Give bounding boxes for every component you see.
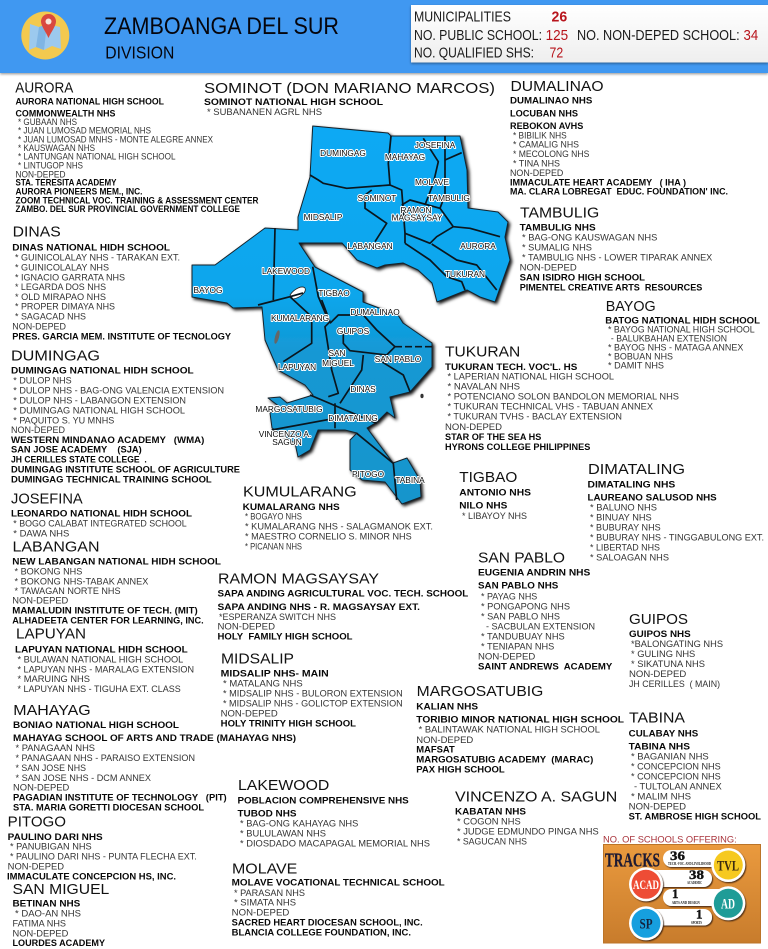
panel: Mahayag: NON-DEPED	[13, 783, 70, 793]
panel: Molave: MOLAVE	[232, 860, 297, 877]
panel: Dumalinao: DUMALINAO	[510, 78, 604, 95]
panel: Dumalinao: DUMALINAO NHS	[510, 96, 592, 106]
panel: Dumingag: DUMINGAG NATIONAL HIDH SCHOOL	[11, 366, 194, 376]
panel: Margosatubig: MARGOSATUBIG ACADEMY (MARAC)	[416, 755, 593, 765]
panel: Ramon Magsaysay: SAPA ANDING NHS - R. MAGSAYSAY EXT.	[218, 602, 420, 612]
panel: Bayog: BATOG NATIONAL HIDH SCHOOL	[605, 316, 760, 326]
panel: Dumingag: DUMINGAG TECHNICAL TRAINING SCHOOL	[11, 474, 212, 484]
panel: Tabina	[629, 710, 761, 822]
panel: Midsalip: MIDSALIP NHS- MAIN	[221, 669, 329, 679]
panel: Dimataling: * SALOAGAN NHS	[590, 553, 669, 563]
panel: San Miguel: NON-DEPED	[12, 928, 69, 938]
panel: Lakewood	[238, 777, 430, 849]
panel: Margosatubig: TORIBIO MINOR NATIONAL HIGH SCHOOL	[416, 715, 624, 725]
panel: Kumularang: * PICANAN NHS	[245, 542, 302, 552]
panel: Lakewood: POBLACION COMPREHENSIVE NHS	[238, 795, 409, 805]
map labels: TIGBAO	[318, 288, 350, 298]
panel: Labangan: ALHADEETA CENTER FOR LEARNING, INC.	[12, 616, 204, 626]
map labels: MAHAYAG	[385, 152, 425, 162]
panel: Midsalip: MIDSALIP	[221, 650, 294, 667]
panel: Lapuyan: LAPUYAN NATIONAL HIDH SCHOOL	[15, 645, 188, 655]
panel: Aurora: ZOOM TECHNICAL VOC. TRAINING & ASSESSMENT CENTER	[16, 195, 259, 205]
panel: Labangan: * BOKONG NHS-TABAK ANNEX	[14, 576, 148, 586]
panel: Dumingag: JH CERILLES STATE COLLEGE .	[11, 455, 147, 465]
panel: Bayog: * DAMIT NHS	[608, 360, 664, 370]
panel: Bayog: * BAYOG NATIONAL HIGH SCHOOL	[608, 325, 755, 335]
panel: San Pablo: - SACBULAN EXTENSION	[486, 621, 595, 631]
panel: Midsalip: * MIDSALIP NHS - BULORON EXTENSION	[223, 689, 403, 699]
track: TVL: 36	[670, 848, 686, 863]
panel: Kumularang: * MAESTRO CORNELIO S. MINOR NHS	[245, 532, 412, 542]
stats box: NO. PUBLIC SCHOOL:	[414, 27, 542, 44]
panel: Dumingag: * DUMINGAG NATIONAL HIGH SCHOOL	[13, 405, 185, 415]
panel: Tukuran: * LAPERIAN NATIONAL HIGH SCHOOL	[448, 372, 614, 382]
panel: Mahayag	[13, 702, 296, 812]
panel: Vincenzo A. Sagun: VINCENZO A. SAGUN	[455, 789, 617, 806]
panel: San Pablo: SAN PABLO	[478, 549, 565, 566]
panel: Josefina: * BOGO CALABAT INTEGRATED SCHOOL	[13, 519, 187, 529]
panel: Tambulig: TAMBULIG NHS	[520, 223, 596, 233]
stats box	[411, 5, 768, 62]
tracks heading: TRACKS	[605, 850, 660, 872]
panel: Sominot: SOMINOT NATIONAL HIGH SCHOOL	[204, 97, 383, 107]
panel: Labangan: LABANGAN	[12, 538, 100, 555]
subtitle: DIVISION	[105, 42, 174, 62]
panel: San Pablo: * SAN PABLO NHS	[481, 611, 560, 621]
panel: Tukuran: NON-DEPED	[445, 422, 502, 432]
panel: Dumingag: * DULOP NHS - LABANGON EXTENSION	[13, 395, 186, 405]
stats box: 72	[550, 44, 563, 61]
panel: Lapuyan: * MARUING NHS	[18, 674, 90, 684]
panel: Dimataling	[588, 461, 764, 563]
panel: Dumalinao	[510, 78, 728, 196]
panel: Dinas: DINAS NATIONAL HIDH SCHOOL	[12, 243, 170, 253]
panel: Labangan: * TAWAGAN NORTE NHS	[14, 586, 120, 596]
panel: Dinas: DINAS	[13, 224, 61, 241]
panel: Dumalinao: IMMACULATE HEART ACADEMY ( IHA )	[510, 177, 686, 187]
panel: Aurora: COMMONWEALTH NHS	[16, 109, 116, 119]
panel: Guipos: NON-DEPED	[629, 669, 687, 679]
panel: Vincenzo A. Sagun	[455, 789, 617, 846]
map labels: GUIPOS	[337, 326, 370, 336]
panel: Margosatubig: MARGOSATUBIG	[417, 683, 543, 700]
panel: Dumingag: DUMINGAG	[11, 348, 100, 365]
panel: Sominot: SOMINOT (DON MARIANO MARCOS)	[204, 80, 495, 97]
map labels: MAGSAYSAY	[392, 212, 443, 222]
panel: Ramon Magsaysay: *ESPERANZA SWITCH NHS	[219, 612, 336, 622]
map labels: AURORA	[460, 241, 496, 251]
panel: Pitogo: PAULINO DARI NHS	[8, 832, 103, 842]
panel: Josefina: JOSEFINA	[11, 490, 83, 507]
panel: Molave: * SIMATA NHS	[234, 898, 296, 908]
map labels: SAN	[328, 348, 346, 358]
panel: Dumingag: NON-DEPED	[11, 425, 65, 435]
panel: Aurora: * KAUSWAGAN NHS	[18, 143, 95, 153]
panel: Tigbao: NILO NHS	[459, 501, 507, 511]
panel: Dumingag: SAN JOSE ACADEMY (SJA)	[11, 445, 142, 455]
panel: Dimataling: * BUBURAY NHS - TINGGABULONG EXT.	[590, 533, 764, 543]
track: AD: AD	[721, 896, 735, 912]
panel: Bayog: * BAYOG NHS - MATAGA ANNEX	[608, 342, 743, 352]
panel: Tambulig	[520, 205, 712, 293]
panel: Josefina	[11, 490, 192, 539]
map labels: MIDSALIP	[304, 212, 343, 222]
panel: Mahayag: * PANAGAAN NHS	[16, 743, 95, 753]
panel: Mahayag: * SAN JOSE NHS - DCM ANNEX	[16, 773, 151, 783]
panel: Aurora: * LANTUNGAN NATIONAL HIGH SCHOOL	[18, 152, 176, 162]
stats box: 26	[552, 8, 567, 26]
panel: Kumularang: * KUMALARANG NHS - SALAGMANOK EXT.	[245, 522, 433, 532]
panel: Aurora: AURORA	[15, 80, 73, 97]
panel: San Pablo: * TANDUBUAY NHS	[481, 631, 565, 641]
track: AD: 1	[672, 886, 678, 901]
panel: Tukuran: * POTENCIANO SOLON BANDOLON MEMORIAL NHS	[448, 392, 679, 402]
map labels: LABANGAN	[347, 241, 393, 251]
panel: Ramon Magsaysay	[218, 570, 469, 642]
panel: Molave: BLANCIA COLLEGE FOUNDATION, INC.	[232, 928, 411, 938]
panel: Kumularang	[243, 484, 433, 552]
panel: Tukuran: * TUKURAN TVHS - BACLAY EXTENSION	[448, 412, 622, 422]
panel: Kumularang: KUMULARANG	[243, 484, 357, 501]
panel: Margosatubig	[416, 683, 624, 775]
panel: Tukuran	[445, 344, 679, 452]
panel: Dumalinao: NON-DEPED	[510, 168, 564, 178]
panel: Guipos: *BALONGATING NHS	[631, 639, 723, 649]
panel: San Miguel: * DAO-AN NHS	[15, 908, 81, 918]
panel: Tabina: * CONCEPCION NHS	[631, 762, 721, 772]
panel: Dumalinao: LOCUBAN NHS	[510, 108, 578, 118]
panel: Tabina: TABINA NHS	[629, 742, 690, 752]
panel: Pitogo: IMMACULATE CONCEPCION HS, INC.	[7, 871, 176, 881]
panel: Margosatubig: NON-DEPED	[416, 735, 474, 745]
map labels: LAPUYAN	[278, 362, 316, 372]
map labels: TABINA	[395, 475, 425, 485]
track: TVL	[663, 848, 745, 882]
panel: Tukuran: TUKURAN	[445, 344, 520, 361]
panel: Lakewood: LAKEWOOD	[238, 777, 329, 794]
panel: Dumingag: WESTERN MINDANAO ACADEMY (WMA)	[11, 435, 204, 445]
panel: Vincenzo A. Sagun: * COGON NHS	[457, 816, 521, 826]
map labels: LAKEWOOD	[262, 266, 310, 276]
track: ACAD: 38	[689, 867, 705, 882]
track: AD: ARTS AND DESIGN	[672, 901, 700, 905]
panel: Guipos: * SIKATUNA NHS	[631, 659, 705, 669]
panel: Lakewood: * BAG-ONG KAHAYAG NHS	[240, 819, 358, 829]
panel: Dinas: * PROPER DIMAYA NHS	[15, 302, 115, 312]
panel: Mahayag: BONIAO NATIONAL HIGH SCHOOL	[13, 720, 179, 730]
panel: Tambulig: * TAMBULIG NHS - LOWER TIPARAK ANNEX	[522, 253, 712, 263]
panel: Tambulig: * BAG-ONG KAUSWAGAN NHS	[522, 233, 657, 243]
map labels: RAMON	[401, 205, 431, 215]
panel: Aurora: * JUAN LUMOSAD MNHS - MONTE ALEGRE ANNEX	[18, 134, 213, 144]
header bar	[0, 0, 768, 73]
map labels: TAMBULIG	[428, 193, 470, 203]
panel: Tabina: - TULTOLAN ANNEX	[634, 782, 722, 792]
panel: San Miguel: BETINAN NHS	[12, 899, 80, 909]
panel: Tambulig: * SUMALIG NHS	[522, 243, 592, 253]
panel: Mahayag: * SAN JOSE NHS	[16, 763, 86, 773]
panel: Tigbao: ANTONIO NHS	[459, 487, 531, 497]
panel: Josefina: LEONARDO NATIONAL HIDH SCHOOL	[11, 509, 192, 519]
stats box: NO. NON-DEPED SCHOOL:	[577, 27, 740, 44]
panel: Guipos: GUIPOS NHS	[629, 629, 691, 639]
panel: Dinas: * GUINICOLALAY NHS	[15, 262, 109, 272]
panel: Tabina: * CONCEPCION NHS	[631, 772, 721, 782]
panel: Margosatubig: MAFSAT	[416, 745, 455, 755]
map labels: DIMATALING	[328, 413, 378, 423]
panel: Dumalinao: * MECOLONG NHS	[513, 149, 589, 159]
panel: Dinas: * GUINICOLALAY NHS - TARAKAN EXT.	[15, 253, 180, 263]
panel: Tambulig: SAN ISIDRO HIGH SCHOOL	[520, 273, 645, 283]
map labels: MIGUEL	[322, 358, 354, 368]
map labels: TUKURAN	[445, 269, 485, 279]
panel: Tabina: ST. AMBROSE HIGH SCHOOL	[629, 812, 761, 822]
panel: Mahayag: MAHAYAG SCHOOL OF ARTS AND TRADE (MAHAYAG NHS)	[13, 733, 296, 743]
panel: Midsalip	[221, 650, 403, 729]
panel: Dumingag: * DULOP NHS - BAG-ONG VALENCIA EXTENSION	[13, 386, 224, 396]
panel: Ramon Magsaysay: SAPA ANDING AGRICULTURAL VOC. TECH. SCHOOL	[218, 589, 469, 599]
panel: Pitogo: * PANUBIGAN NHS	[10, 842, 92, 852]
panel: Bayog: - BALUKBAHAN EXTENSION	[608, 333, 727, 343]
panel: Dimataling: LAUREANO SALUSOD NHS	[588, 493, 717, 503]
panel: Ramon Magsaysay: RAMON MAGSAYSAY	[218, 570, 379, 587]
panel: Midsalip: NON-DEPED	[221, 709, 278, 719]
panel: Tabina: TABINA	[629, 710, 685, 727]
panel: Pitogo	[7, 814, 197, 881]
panel: Labangan	[12, 538, 221, 626]
panel: Sominot	[204, 80, 495, 117]
panel: Guipos: * GULING NHS	[631, 649, 695, 659]
panel: Mahayag: * PANAGAAN NHS - PARAISO EXTENSION	[16, 753, 195, 763]
panel: Labangan: MAMALUDIN INSTITUTE OF TECH. (MIT)	[12, 606, 198, 616]
panel: Sominot: * SUBANANEN AGRL NHS	[207, 107, 322, 117]
panel: Tukuran: * TUKURAN TECHNICAL VHS - TABUAN ANNEX	[448, 402, 653, 412]
panel: Dimataling: * BUBURAY NHS	[590, 523, 661, 533]
panel: Vincenzo A. Sagun: * JUDGE EDMUNDO PINGA NHS	[457, 826, 599, 836]
panel: Tabina: * MALIM NHS	[631, 792, 691, 802]
panel: Dinas: * OLD MIRAPAO NHS	[15, 292, 106, 302]
panel: Dinas: NON-DEPED	[12, 321, 66, 331]
panel: Lapuyan: * BULAWAN NATIONAL HIGH SCHOOL	[18, 655, 183, 665]
panel: San Miguel	[12, 881, 109, 948]
panel: Dumingag: * PAQUITO S. YU MNHS	[13, 415, 114, 425]
panel: Tabina: CULABAY NHS	[629, 729, 698, 739]
panel: Vincenzo A. Sagun: KABATAN NHS	[455, 807, 526, 817]
panel: Dumalinao: * TINA NHS	[513, 158, 560, 168]
map labels: BAYOG	[194, 285, 222, 295]
panel: Tigbao	[459, 469, 531, 521]
track: SP: SP	[640, 916, 652, 932]
panel: Aurora: STA. TERESITA ACADEMY	[16, 178, 116, 188]
panel: Ramon Magsaysay: NON-DEPED	[218, 622, 275, 632]
track: ACAD: ACAD	[633, 877, 659, 892]
panel: Dimataling: DIMATALING NHS	[588, 479, 675, 489]
panel: Mahayag: STA. MARIA GORETTI DIOCESAN SCHOOL	[13, 802, 204, 812]
panel: Mahayag: PAGADIAN INSTITUTE OF TECHNOLOGY (PIT)	[13, 793, 227, 803]
panel: Aurora	[15, 80, 259, 214]
panel: Dinas	[12, 224, 231, 341]
panel: Vincenzo A. Sagun: * SAGUCAN NHS	[457, 836, 527, 846]
panel: Bayog: * BOBUAN NHS	[608, 351, 673, 361]
panel: Tukuran: HYRONS COLLEGE PHILIPPINES	[445, 442, 590, 452]
panel: Lakewood: * DIOSDADO MACAPAGAL MEMORIAL NHS	[240, 839, 430, 849]
map labels: KUMALARANG	[271, 313, 329, 323]
panel: Dumalinao: MA. CLARA LOBREGAT EDUC. FOUNDATION' INC.	[510, 186, 728, 196]
track: SP: SPORTS	[691, 921, 702, 925]
panel: San Pablo: * PONGAPONG NHS	[481, 601, 570, 611]
panel: Dumalinao: * BIBILIK NHS	[513, 130, 567, 140]
panel: Dimataling: * BALUNO NHS	[590, 503, 657, 513]
track: ACAD: ACADEMIC	[687, 881, 702, 885]
panel: Guipos: GUIPOS	[629, 611, 688, 628]
map labels	[194, 140, 496, 485]
panel: Lakewood: TUBOD NHS	[238, 809, 296, 819]
panel: San Miguel: LOURDES ACADEMY	[12, 938, 105, 948]
panel: Aurora: AURORA PIONEERS MEM., INC.	[16, 186, 142, 196]
panel: Guipos: JH CERILLES ( MAIN)	[629, 679, 720, 689]
panel: Dinas: * IGNACIO GARRATA NHS	[15, 272, 125, 282]
stats box: 34	[744, 27, 758, 44]
map labels: MARGOSATUBIG	[255, 404, 323, 414]
panel: Aurora: * LINTUGOP NHS	[18, 160, 83, 170]
panel: Bayog	[605, 298, 760, 370]
map labels: SOMINOT	[358, 193, 396, 203]
map labels: DUMINGAG	[320, 148, 366, 158]
panel: Mahayag: MAHAYAG	[13, 702, 91, 719]
panel: Tukuran: STAR OF THE SEA HS	[445, 432, 541, 442]
panel: San Pablo: * TENIAPAN NHS	[481, 641, 554, 651]
panel: Pitogo: * PAULINO DARI NHS - PUNTA FLECHA EXT.	[10, 852, 197, 862]
map labels: JOSEFINA	[415, 140, 456, 150]
panel: Lakewood: * BULULAWAN NHS	[240, 829, 326, 839]
map labels: SAN PABLO	[375, 354, 422, 364]
panel: San Miguel: FATIMA NHS	[12, 918, 66, 928]
panel: Kumularang: KUMALARANG NHS	[243, 502, 340, 512]
panel: Aurora: * GUBAAN NHS	[18, 117, 77, 127]
panel: San Pablo	[478, 549, 612, 671]
panel: San Pablo: SAN PABLO NHS	[478, 581, 558, 591]
panel: Dinas: * LEGARDA DOS NHS	[15, 282, 106, 292]
panel: Midsalip: * MATALANG NHS	[223, 679, 303, 689]
panel: Tambulig: TAMBULIG	[520, 205, 599, 222]
panel: Ramon Magsaysay: HOLY FAMILY HIGH SCHOOL	[218, 632, 353, 642]
panel: San Pablo: SAINT ANDREWS ACADEMY	[478, 661, 612, 671]
panel: Tabina: * BAGANIAN NHS	[631, 752, 709, 762]
track: TVL: TVL	[717, 858, 739, 874]
panel: Dumingag: * DULOP NHS	[13, 376, 72, 386]
panel: Labangan: NEW LABANGAN NATIONAL HIDH SCHOOL	[12, 556, 221, 566]
track: ACAD	[629, 867, 712, 901]
track: TVL: TECH.-VOC. AND LIVELIHOOD	[668, 862, 711, 866]
panel: Pitogo: NON-DEPED	[8, 861, 64, 871]
panel: San Pablo: * PAYAG NHS	[481, 591, 537, 601]
map labels: SAGUN	[272, 437, 302, 447]
panel: Tukuran: TUKURAN TECH. VOC'L. HS	[445, 362, 577, 372]
panel: Molave	[232, 860, 445, 938]
stats box: MUNICIPALITIES	[414, 8, 511, 26]
panel: Lapuyan: * LAPUYAN NHS - MARALAG EXTENSION	[18, 664, 194, 674]
icon: map pin	[21, 12, 69, 60]
panel: Dimataling: * LIBERTAD NHS	[590, 543, 660, 553]
map labels: DINAS	[350, 384, 376, 394]
stats box: NO. QUALIFIED SHS:	[414, 44, 534, 61]
panel: Pitogo: PITOGO	[8, 814, 66, 831]
track: AD	[663, 886, 745, 920]
map labels: PITOGO	[352, 469, 385, 479]
panel: Dimataling: * BINUAY NHS	[590, 513, 652, 523]
panel: Dinas: * SAGACAD NHS	[15, 312, 86, 322]
panel: San Miguel: SAN MIGUEL	[12, 881, 109, 898]
panel: Lapuyan: * LAPUYAN NHS - TIGUHA EXT. CLASS	[18, 684, 181, 694]
panel: Midsalip: HOLY TRINITY HIGH SCHOOL	[221, 719, 356, 729]
panel: Molave: SACRED HEART DIOCESAN SCHOOL, INC.	[232, 918, 423, 928]
panel: San Pablo: EUGENIA ANDRIN NHS	[478, 567, 590, 577]
panel: Dumingag	[11, 348, 240, 484]
map labels: MOLAVE	[415, 177, 449, 187]
panel: Dumalinao: * CAMALIG NHS	[513, 140, 579, 150]
panel: Lapuyan	[15, 626, 194, 694]
map labels: DUMALINAO	[350, 307, 400, 317]
panel: Tukuran: * NAVALAN NHS	[448, 382, 520, 392]
map labels: VINCENZO A.	[259, 429, 311, 439]
caption: number of schools offering: NO. OF SCHOOLS OFFERING:	[603, 834, 737, 844]
panel: Josefina: * DAWA NHS	[13, 529, 69, 539]
panel: Margosatubig: * BALINTAWAK NATIONAL HIGH SCHOOL	[419, 725, 600, 735]
panel: Dumingag: DUMINGAG INSTITUTE SCHOOL OF AGRICULTURE	[11, 464, 240, 474]
panel: Aurora: ZAMBO. DEL SUR PROVINCIAL GOVERNMENT COLLEGE	[16, 204, 240, 214]
panel: Labangan: * BOKONG NHS	[14, 566, 82, 576]
panel: Tigbao: TIGBAO	[459, 469, 517, 486]
panel: Bayog: BAYOG	[606, 298, 656, 315]
panel: Lapuyan: LAPUYAN	[16, 626, 86, 643]
panel: Tambulig: NON-DEPED	[520, 263, 577, 273]
panel: Molave: MOLAVE VOCATIONAL TECHNICAL SCHOOL	[232, 878, 445, 888]
panel: Molave: NON-DEPED	[232, 908, 290, 918]
panel: Tambulig: PIMENTEL CREATIVE ARTS RESOURCES	[520, 283, 702, 293]
title: ZAMBOANGA DEL SUR	[104, 13, 339, 40]
track: SP	[629, 906, 712, 940]
panel: Labangan: NON-DEPED	[12, 596, 69, 606]
panel: Margosatubig: KALIAN NHS	[416, 701, 478, 711]
panel: Aurora: * JUAN LUMOSAD MEMORIAL NHS	[18, 126, 151, 136]
panel: Kumularang: * BOGAYO NHS	[245, 512, 302, 522]
stats box: 125	[546, 27, 568, 44]
panel: Midsalip: * MIDSALIP NHS - GOLICTOP EXTENSION	[223, 699, 403, 709]
panel: tracks	[604, 844, 760, 943]
panel: Aurora: AURORA NATIONAL HIGH SCHOOL	[16, 97, 164, 107]
panel: Dinas: PRES. GARCIA MEM. INSTITUTE OF TECNOLOGY	[12, 331, 231, 341]
panel: Tigbao: * LIBAYOY NHS	[462, 511, 527, 521]
panel: San Pablo: NON-DEPED	[478, 651, 536, 661]
panel: Dumalinao: REBOKON AVHS	[510, 121, 583, 131]
panel: Guipos	[629, 611, 723, 689]
panel: Aurora: NON-DEPED	[16, 169, 66, 179]
panel: Molave: * PARASAN NHS	[234, 888, 305, 898]
map of Zamboanga del Sur	[192, 126, 510, 504]
panel: Tabina: NON-DEPED	[629, 802, 686, 812]
panel: Margosatubig: PAX HIGH SCHOOL	[416, 765, 505, 775]
panel: Dimataling: DIMATALING	[588, 461, 685, 478]
track: SP: 1	[696, 907, 702, 922]
